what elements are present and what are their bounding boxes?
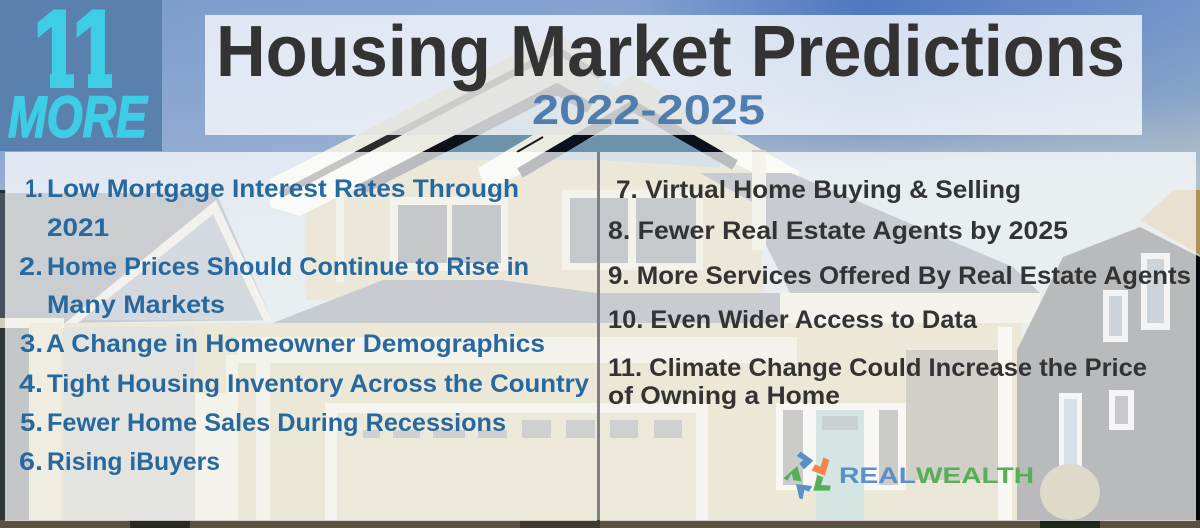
right garage door [600, 403, 708, 528]
logo: RealWealth: WEALTH [916, 463, 1034, 488]
item 11: 11. Climate Change Could Increase the Price [608, 354, 1147, 382]
item 1: 2021 [47, 214, 109, 242]
item 11 [608, 354, 1147, 410]
item 5: Fewer Home Sales During Recessions [47, 409, 506, 437]
far left dark trees edge [0, 190, 6, 528]
item 9: 9. More Services Offered By Real Estate Agents [608, 262, 1191, 290]
panel gap line [597, 152, 600, 520]
item 3: A Change in Homeowner Demographics [46, 330, 545, 358]
icon: four arrows [783, 452, 831, 499]
title: Housing Market Predictions [216, 12, 1125, 92]
panel: title box [205, 12, 1142, 135]
small gable trim [478, 75, 800, 192]
front door with sidelights [776, 403, 906, 490]
subtitle years: 2022-2025 [532, 86, 765, 133]
big number 11 [38, 10, 112, 88]
item 7: 7. Virtual Home Buying & Selling [616, 176, 1021, 204]
right dark house [1017, 227, 1200, 528]
left gable siding [84, 208, 262, 320]
ground strip [0, 520, 1200, 528]
item 5: 5. [20, 409, 43, 437]
big gable siding [405, 60, 720, 200]
porch post [906, 350, 998, 520]
item 4: Tight Housing Inventory Across the Country [47, 370, 589, 398]
logo: RealWealth [783, 452, 1034, 499]
item 2 [19, 253, 529, 319]
left garage door [325, 403, 597, 528]
item 3: 3. [20, 330, 43, 358]
wordmark: REAL [839, 463, 916, 488]
item 4: 4. [19, 370, 43, 398]
main roof [237, 280, 795, 337]
left garage roof [0, 193, 272, 323]
item 2: Many Markets [47, 291, 225, 319]
right roof [700, 173, 1040, 293]
item 2: 2. [19, 253, 43, 281]
item 2: Home Prices Should Continue to Rise in [47, 253, 529, 281]
shrub [1040, 464, 1100, 520]
item 8: 8. Fewer Real Estate Agents by 2025 [608, 217, 1068, 245]
big gable trim [270, 33, 600, 216]
main upper wall [306, 160, 765, 300]
panel: predictions 7 to 11 [600, 152, 1196, 521]
word MORE: MORE [8, 85, 149, 150]
item 10: 10. Even Wider Access to Data [608, 306, 978, 334]
panel: "11 more" badge [0, 0, 162, 151]
item 6: 6. [19, 448, 43, 476]
item 1: 1. [25, 175, 43, 203]
upper windows [390, 197, 508, 271]
lower wall [61, 323, 1021, 528]
item 1 [25, 175, 519, 242]
item 6: Rising iBuyers [47, 448, 220, 476]
trim shading behind the title box [357, 36, 736, 135]
left side lower wall and posts [0, 328, 29, 528]
panel: predictions 1 to 6 [5, 152, 597, 521]
item 11: of Owning a Home [608, 382, 840, 410]
item 1: Low Mortgage Interest Rates Through [47, 175, 519, 203]
